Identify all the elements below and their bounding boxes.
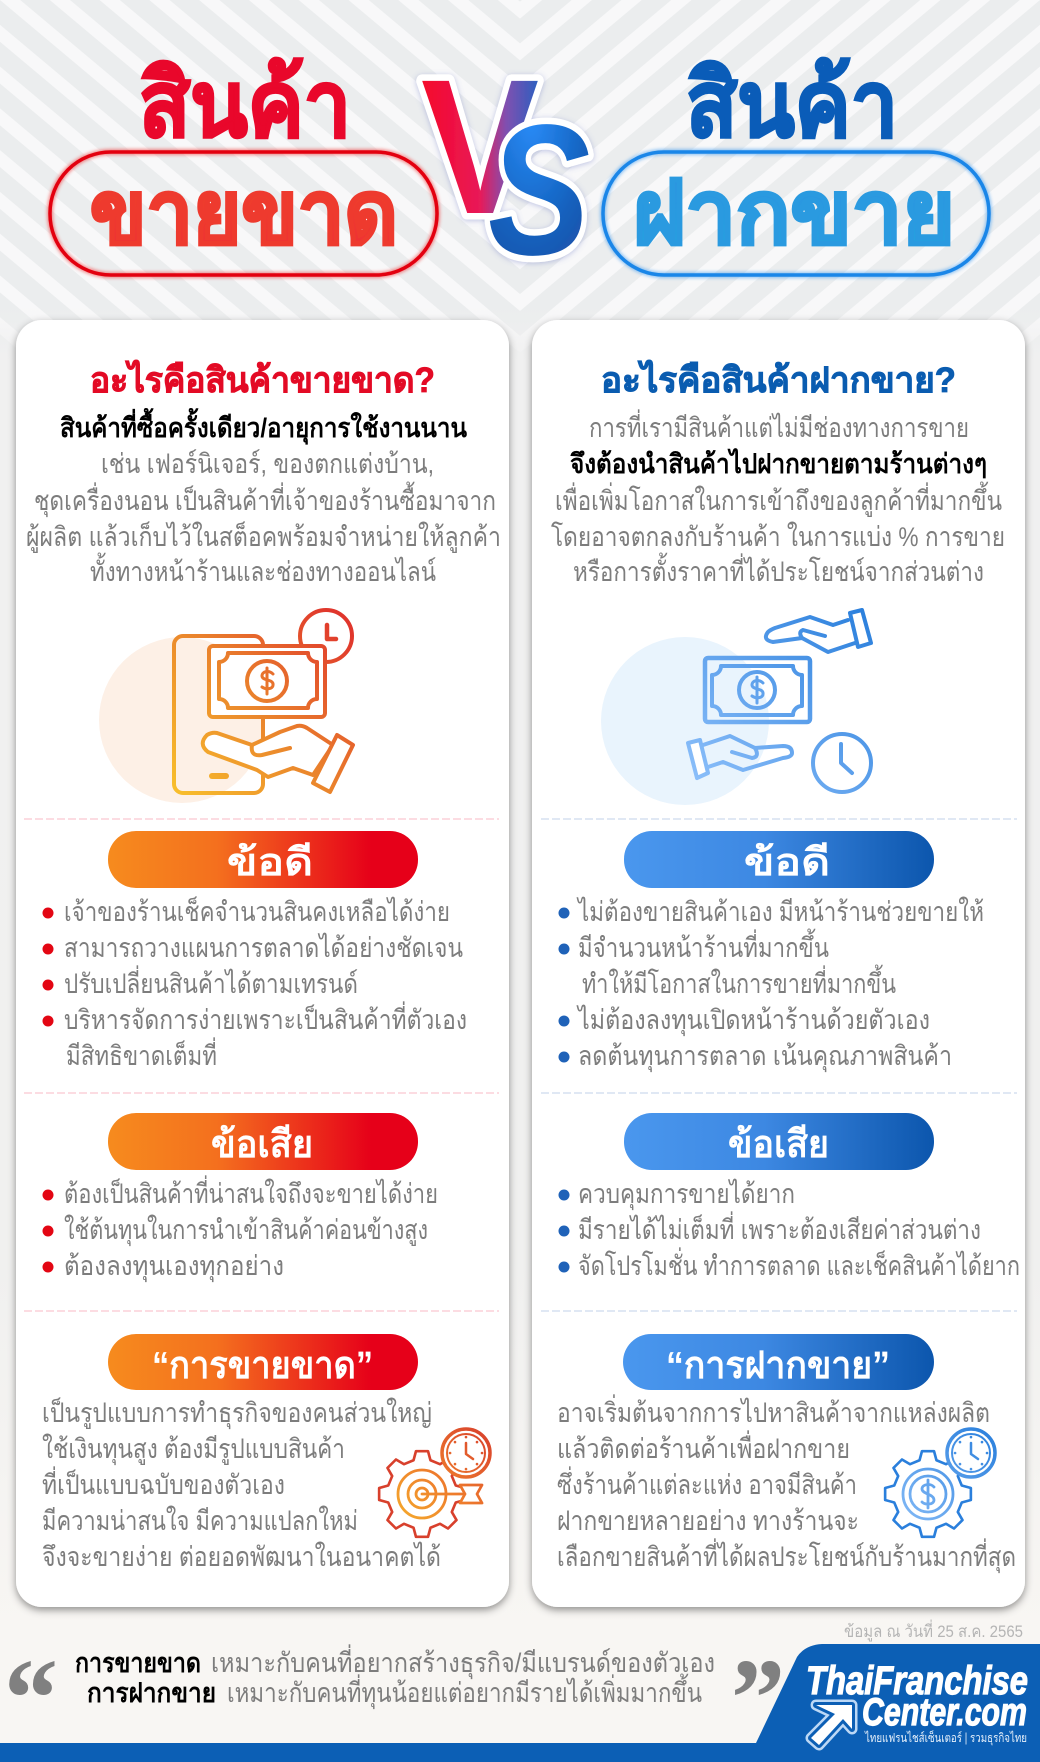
letter S: S bbox=[488, 87, 590, 294]
label pill: ข้อเสีย: ข้อเสีย bbox=[211, 1124, 313, 1166]
label pill: ข้อดี: ข้อดี bbox=[227, 842, 313, 884]
summary comparison text: เหมาะกับคนที่ทุนน้อยแต่อยากมีรายได้เพิ่มมากขึ้น bbox=[227, 1673, 702, 1710]
divider bbox=[24, 1092, 499, 1094]
divider bbox=[541, 1092, 1017, 1094]
definition text: สินค้าที่ซื้อครั้งเดียว/อายุการใช้งานนาน bbox=[60, 407, 467, 445]
bullet list: ข้อดี bbox=[42, 894, 467, 1071]
heading: อะไรคือสินค้าขายขาด? bbox=[90, 359, 435, 400]
summary comparison text: การฝากขาย bbox=[87, 1678, 216, 1708]
heading: อะไรคือสินค้าฝากขาย? bbox=[601, 359, 956, 400]
icon: phone, money and hand bbox=[99, 610, 353, 803]
label pill: ข้อเสีย: ข้อเสีย bbox=[728, 1124, 829, 1166]
closing quote: ” bbox=[731, 1637, 785, 1761]
summary text: ใช้เงินทุนสูง ต้องมีรูปแบบสินค้า bbox=[42, 1433, 345, 1466]
summary text: ซึ่งร้านค้าแต่ละแห่ง อาจมีสินค้า bbox=[557, 1466, 857, 1500]
summary comparison text: การขายขาด bbox=[75, 1648, 201, 1678]
title: right product bbox=[603, 54, 989, 275]
footer brand block bbox=[0, 1644, 1040, 1762]
bullet list: ข้อเสีย bbox=[42, 1175, 438, 1283]
definition text: ทั้งทางหน้าร้านและช่องทางออนไลน์ bbox=[90, 552, 436, 587]
title text: สินค้า red: สินค้า bbox=[139, 54, 351, 156]
bullet list: ข้อดี: ลดต้นทุนการตลาด เน้นคุณภาพสินค้า bbox=[578, 1041, 952, 1073]
label pill: การขายขาด bbox=[108, 1334, 418, 1390]
bullet list: ข้อดี bbox=[558, 896, 984, 1073]
divider bbox=[24, 1310, 499, 1312]
opening quote mark: “ bbox=[4, 1637, 58, 1761]
label pill: ข้อดี bbox=[108, 831, 418, 888]
icon: gear, coin and clock bbox=[885, 1429, 995, 1537]
definition text: ชุดเครื่องนอน เป็นสินค้าที่เจ้าของร้านซื้อมาจาก bbox=[34, 481, 496, 518]
icon: hands, money and clock bbox=[601, 610, 871, 805]
definition text bbox=[551, 409, 1005, 587]
VS emblem bbox=[421, 39, 590, 294]
bullet list: ข้อดี: มีสิทธิขาดเต็มที่ bbox=[66, 1037, 217, 1071]
title pill: ขายขาด: ขายขาด bbox=[90, 163, 398, 262]
bullet list: ข้อดี: ไม่ต้องลงทุนเปิดหน้าร้านด้วยตัวเอง bbox=[576, 1005, 930, 1037]
bullet list: ข้อเสีย: ต้องเป็นสินค้าที่น่าสนใจถึงจะขายได้ง่าย bbox=[64, 1175, 438, 1209]
definition text: จึงต้องนำสินค้าไปฝากขายตามร้านต่างๆ bbox=[570, 448, 987, 479]
definition text: เช่น เฟอร์นิเจอร์, ของตกแต่งบ้าน, bbox=[101, 448, 434, 479]
summary text: ที่เป็นแบบฉบับของตัวเอง bbox=[42, 1466, 285, 1500]
divider bbox=[541, 1310, 1017, 1312]
title pill: ฝากขาย: ฝากขาย bbox=[633, 163, 955, 262]
label pill: การฝากขาย: “การฝากขาย” bbox=[666, 1345, 890, 1387]
icon: gear, target and clock bbox=[379, 1429, 490, 1537]
summary text: จึงจะขายง่าย ต่อยอดพัฒนาในอนาคตได้ bbox=[42, 1541, 441, 1572]
title pill: ฝากขาย bbox=[603, 152, 989, 275]
bullet list: ข้อเสีย bbox=[558, 1179, 1020, 1281]
summary text: มีความน่าสนใจ มีความแปลกใหม่ bbox=[42, 1505, 358, 1536]
summary text bbox=[557, 1394, 1016, 1574]
title: left product bbox=[50, 54, 437, 275]
divider bbox=[24, 818, 499, 820]
summary comparison text: เหมาะกับคนที่อยากสร้างธุรกิจ/มีแบรนด์ของตัวเอง bbox=[211, 1644, 715, 1680]
bullet list: ข้อดี: บริหารจัดการง่ายเพราะเป็นสินค้าที่ตัวเอง bbox=[64, 1001, 467, 1035]
label pill: ข้อเสีย bbox=[108, 1113, 418, 1170]
title text: สินค้า blue: สินค้า bbox=[686, 54, 898, 156]
summary comparison text bbox=[75, 1644, 715, 1710]
summary text: ฝากขายหลายอย่าง ทางร้านจะ bbox=[557, 1506, 859, 1536]
bullet list: ข้อเสีย: ต้องลงทุนเองทุกอย่าง bbox=[64, 1251, 284, 1283]
panel: สินค้าฝากขาย bbox=[532, 320, 1025, 1607]
bullet list: ข้อดี: ทำให้มีโอกาสในการขายที่มากขึ้น bbox=[582, 964, 896, 999]
definition text: การที่เรามีสินค้าแต่ไม่มีช่องทางการขาย bbox=[589, 409, 969, 443]
bullet list: ข้อดี: ปรับเปลี่ยนสินค้าได้ตามเทรนด์ bbox=[64, 965, 358, 999]
definition text: ผู้ผลิต แล้วเก็บไว้ในสต็อคพร้อมจำหน่ายให้ลูกค้า bbox=[26, 519, 501, 553]
summary text: แล้วติดต่อร้านค้าเพื่อฝากขาย bbox=[557, 1430, 850, 1464]
label pill: ข้อดี: ข้อดี bbox=[744, 842, 830, 884]
summary text bbox=[42, 1395, 441, 1572]
letter V: V bbox=[421, 39, 539, 254]
bullet list: ข้อดี: เจ้าของร้านเช็คจำนวนสินคงเหลือได้ง่าย bbox=[64, 894, 450, 927]
definition text bbox=[26, 407, 501, 587]
panel: สินค้าขายขาด bbox=[16, 320, 509, 1607]
bullet list: ข้อดี: สามารถวางแผนการตลาดได้อย่างชัดเจน bbox=[64, 933, 463, 963]
divider bbox=[541, 818, 1017, 820]
logo arrow bbox=[811, 1705, 852, 1745]
bullet list: ข้อเสีย: ควบคุมการขายได้ยาก bbox=[578, 1179, 795, 1211]
summary text: เป็นรูปแบบการทำธุรกิจของคนส่วนใหญ่ bbox=[42, 1395, 432, 1430]
bullet list: ข้อเสีย: ใช้ต้นทุนในการนำเข้าสินค้าค่อนข้างสูง bbox=[64, 1214, 428, 1247]
title pill: ขายขาด bbox=[50, 152, 437, 275]
label pill: ข้อดี bbox=[624, 831, 934, 888]
label pill: การขายขาด: “การขายขาด” bbox=[152, 1345, 373, 1387]
label pill: ข้อเสีย bbox=[624, 1113, 934, 1170]
bullet list: ข้อดี: มีจำนวนหน้าร้านที่มากขึ้น bbox=[578, 928, 829, 963]
label pill: การฝากขาย bbox=[623, 1334, 934, 1390]
